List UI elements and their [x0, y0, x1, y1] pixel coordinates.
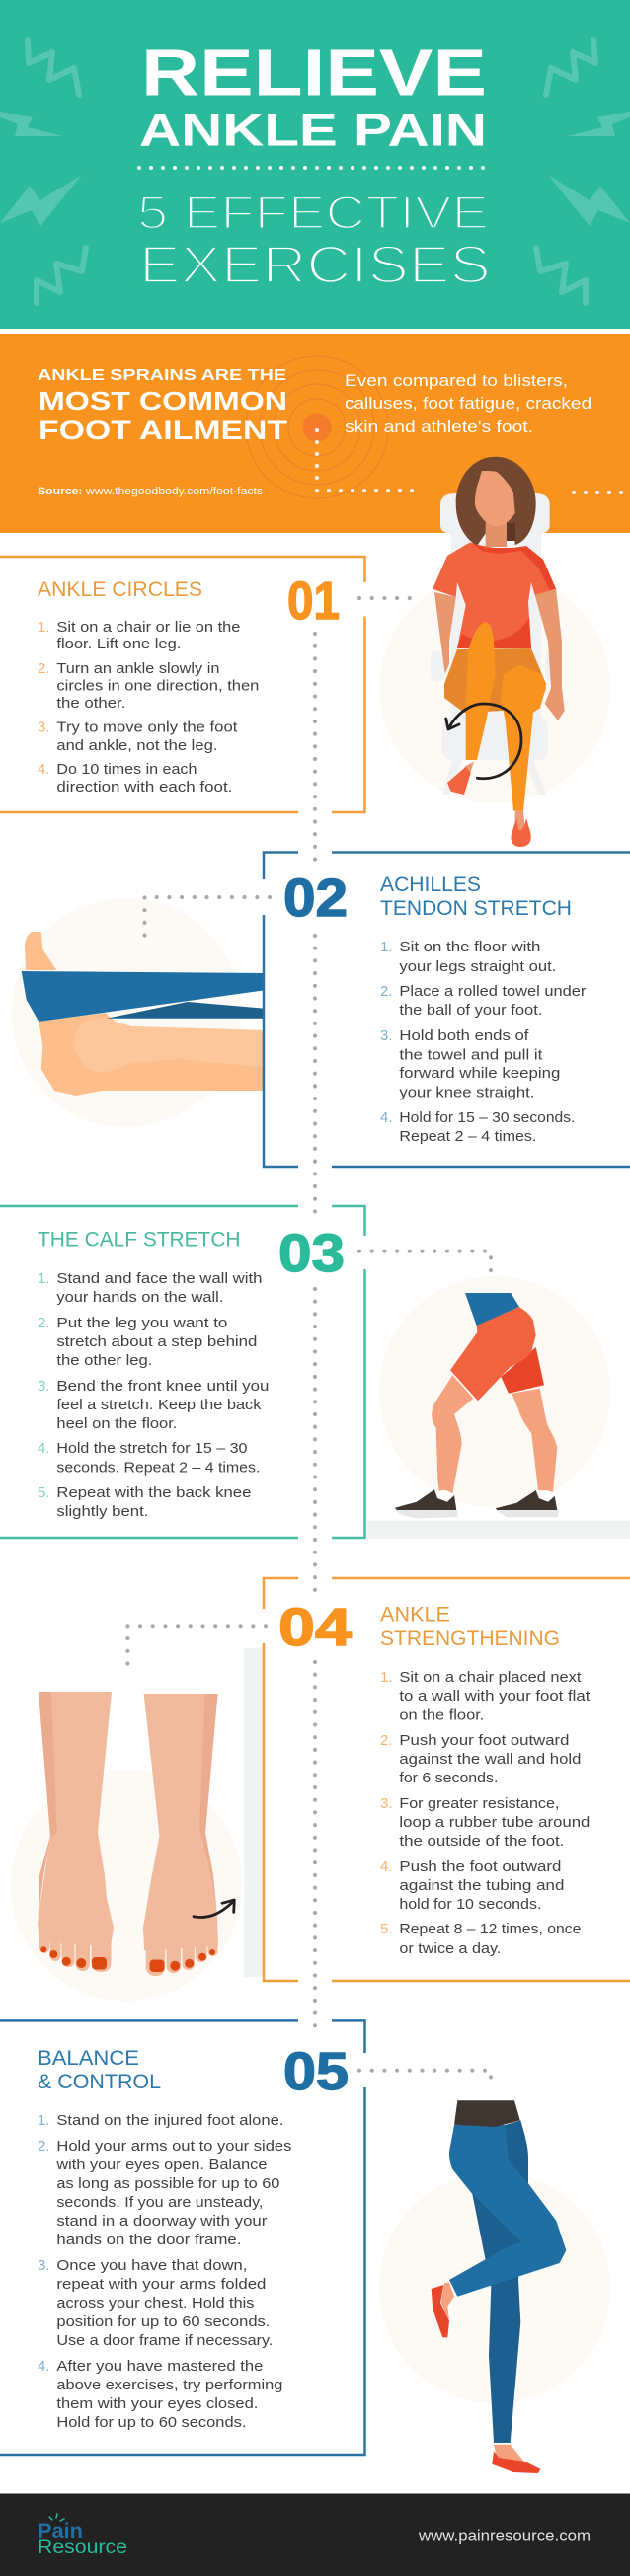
heading: THE CALF STRETCH — [38, 1229, 241, 1251]
steps: Once you have that down, — [56, 2257, 247, 2274]
steps — [38, 1270, 269, 1520]
panel: balance and control — [0, 2020, 610, 2473]
icon: left pain zigzags — [0, 39, 86, 303]
steps: as long as possible for up to 60 — [56, 2175, 279, 2192]
heading — [380, 873, 572, 920]
steps: 3. — [38, 1378, 50, 1395]
steps: Bend the front knee until you — [56, 1378, 269, 1395]
steps: direction with each foot. — [56, 779, 232, 796]
website: www.painresource.com — [418, 2527, 591, 2545]
steps: 3. — [380, 1027, 393, 1044]
steps: Sit on the floor with — [399, 939, 540, 955]
steps: forward while keeping — [399, 1065, 560, 1082]
logo: Pain Resource: Pain — [38, 2520, 83, 2542]
intro text: calluses, foot fatigue, cracked — [345, 395, 591, 413]
title: RELIEVE — [141, 36, 487, 110]
steps: hold for 10 seconds. — [399, 1896, 541, 1913]
steps: floor. Lift one leg. — [56, 636, 181, 652]
panel frame — [0, 1206, 365, 1538]
steps: Hold for 15 – 30 seconds. — [399, 1109, 575, 1126]
steps: the towel and pull it — [399, 1046, 543, 1063]
heading: STRENGTHENING — [380, 1628, 560, 1650]
heading — [38, 2047, 161, 2093]
heading: & CONTROL — [38, 2071, 161, 2093]
toenails — [40, 1946, 215, 1972]
illustration: foot with towel — [12, 898, 265, 1127]
steps: 3. — [38, 2257, 50, 2274]
heading — [380, 1604, 560, 1650]
illustration: balancing leg — [379, 2100, 610, 2473]
steps: the outside of the foot. — [399, 1833, 564, 1850]
steps: for 6 seconds. — [399, 1770, 498, 1786]
steps: 2. — [38, 660, 50, 677]
icon: right pain zigzags — [536, 39, 630, 303]
steps: position for up to 60 seconds. — [56, 2313, 270, 2330]
steps: Sit on a chair or lie on the — [56, 619, 240, 636]
arrow: rotation — [446, 704, 521, 779]
heading: ANKLE CIRCLES — [38, 578, 202, 601]
title — [137, 36, 491, 295]
panel: ankle strengthening — [11, 1578, 630, 2001]
illustration: seated woman — [379, 457, 610, 847]
steps: against the wall and hold — [399, 1751, 581, 1768]
steps: 1. — [38, 1270, 50, 1287]
steps: your knee straight. — [399, 1084, 534, 1101]
steps: feel a stretch. Keep the back — [56, 1397, 262, 1413]
steps: 4. — [38, 761, 50, 778]
steps — [380, 939, 586, 1145]
intro heading — [38, 367, 288, 445]
panel frame — [264, 853, 630, 1167]
panel: achilles tendon stretch — [12, 853, 630, 1167]
arrow: push outward — [194, 1900, 234, 1918]
steps: them with your eyes closed. — [56, 2395, 258, 2412]
t-shirt — [433, 543, 556, 648]
footer — [0, 2493, 630, 2576]
panel frame — [0, 2020, 365, 2455]
steps: Repeat with the back knee — [56, 1484, 251, 1501]
steps: seconds. Repeat 2 – 4 times. — [56, 1460, 260, 1477]
steps: 4. — [380, 1858, 393, 1875]
trousers — [444, 648, 546, 713]
steps: 4. — [38, 2358, 50, 2375]
steps: Repeat 8 – 12 times, once — [399, 1921, 581, 1937]
step number 04: 04 — [278, 1598, 352, 1657]
steps: your hands on the wall. — [56, 1289, 223, 1306]
steps: against the tubing and — [399, 1877, 564, 1894]
illustration: calf stretch legs — [366, 1276, 630, 1539]
steps: your legs straight out. — [399, 958, 556, 975]
illustration: feet against wall — [11, 1648, 264, 2001]
steps: 1. — [38, 619, 50, 636]
orange intro panel — [0, 334, 630, 533]
steps: circles in one direction, then — [56, 678, 259, 695]
steps: Hold the stretch for 15 – 30 — [56, 1440, 247, 1457]
logo: Pain Resource — [38, 2514, 127, 2558]
intro heading: ANKLE SPRAINS ARE THE — [38, 367, 286, 384]
logo: Pain Resource: Resource — [38, 2538, 127, 2558]
steps: Hold for up to 60 seconds. — [56, 2414, 246, 2431]
steps: and ankle, not the leg. — [56, 737, 217, 754]
panel: ankle circles — [0, 457, 610, 847]
steps: 4. — [38, 1440, 50, 1457]
steps — [38, 2112, 291, 2431]
steps: Try to move only the foot — [56, 720, 238, 736]
intro text: Even compared to blisters, — [345, 372, 568, 390]
heading: TENDON STRETCH — [380, 897, 572, 920]
source: Source: www.thegoodbody.com/foot-facts — [38, 486, 264, 497]
steps — [380, 1669, 591, 1957]
steps: Use a door frame if necessary. — [56, 2332, 273, 2349]
steps: 4. — [380, 1109, 393, 1126]
steps: repeat with your arms folded — [56, 2276, 266, 2293]
steps: 2. — [380, 1732, 393, 1749]
steps: Stand and face the wall with — [56, 1270, 262, 1287]
steps: 3. — [38, 720, 50, 736]
step number 05: 05 — [283, 2042, 349, 2101]
central dotted timeline — [313, 634, 317, 2035]
steps: 3. — [380, 1795, 393, 1812]
chair — [431, 493, 559, 795]
steps: 2. — [38, 1315, 50, 1331]
steps: the ball of your foot. — [399, 1002, 542, 1019]
steps: Turn an ankle slowly in — [56, 660, 219, 677]
steps: Hold your arms out to your sides — [56, 2138, 291, 2155]
steps: 1. — [38, 2112, 50, 2129]
steps: Push the foot outward — [399, 1858, 561, 1875]
heading: ACHILLES — [380, 873, 481, 896]
steps: loop a rubber tube around — [399, 1814, 590, 1831]
steps: with your eyes open. Balance — [55, 2157, 267, 2173]
steps: stretch about a step behind — [56, 1333, 257, 1350]
steps: seconds. If you are unsteady, — [56, 2194, 263, 2211]
steps: 1. — [380, 1669, 393, 1686]
hair — [456, 457, 536, 546]
steps — [38, 619, 259, 796]
steps: 2. — [38, 2138, 50, 2155]
steps: Push your foot outward — [399, 1732, 569, 1749]
steps: 2. — [380, 983, 393, 1000]
steps: Put the leg you want to — [56, 1315, 227, 1331]
steps: slightly bent. — [56, 1503, 148, 1520]
title: 5 EFFECTIVE — [137, 186, 489, 238]
steps: stand in a doorway with your — [56, 2213, 267, 2230]
steps: the other leg. — [56, 1352, 152, 1369]
steps: 5. — [38, 1484, 50, 1501]
steps: above exercises, try performing — [56, 2377, 282, 2393]
heading: ANKLE — [380, 1604, 450, 1627]
steps: Place a rolled towel under — [399, 983, 586, 1000]
toes — [39, 1930, 217, 1976]
step number 03: 03 — [278, 1224, 345, 1283]
intro heading: MOST COMMON — [39, 386, 287, 416]
panel frame — [264, 1578, 630, 1981]
steps: Stand on the injured foot alone. — [56, 2112, 283, 2129]
steps: 5. — [380, 1921, 393, 1937]
steps: on the floor. — [399, 1707, 484, 1724]
steps: to a wall with your foot flat — [399, 1688, 591, 1705]
intro heading: FOOT AILMENT — [39, 416, 288, 445]
steps: Repeat 2 – 4 times. — [399, 1128, 536, 1145]
panel frame — [0, 557, 365, 812]
steps: the other. — [56, 695, 125, 712]
title: ANKLE PAIN — [139, 104, 487, 155]
steps: hands on the door frame. — [56, 2232, 241, 2248]
heading: BALANCE — [38, 2047, 139, 2070]
step number 02: 02 — [283, 869, 348, 928]
step number 01: 01 — [287, 571, 340, 631]
title: EXERCISES — [139, 235, 491, 294]
steps: or twice a day. — [399, 1940, 501, 1957]
steps: After you have mastered the — [56, 2358, 263, 2375]
steps: Sit on a chair placed next — [399, 1669, 582, 1686]
steps: Hold both ends of — [399, 1027, 529, 1044]
steps: Do 10 times in each — [56, 761, 197, 778]
arms — [434, 592, 456, 674]
icon: pain target rings — [246, 356, 388, 498]
steps: heel on the floor. — [56, 1415, 177, 1432]
steps: 1. — [380, 939, 393, 955]
steps: For greater resistance, — [399, 1795, 559, 1812]
steps: across your chest. Hold this — [56, 2295, 254, 2311]
intro text — [345, 372, 591, 436]
panel: the calf stretch — [0, 1206, 630, 1539]
header panel — [0, 0, 630, 329]
intro text: skin and athlete's foot. — [345, 418, 533, 436]
feet — [457, 762, 474, 778]
